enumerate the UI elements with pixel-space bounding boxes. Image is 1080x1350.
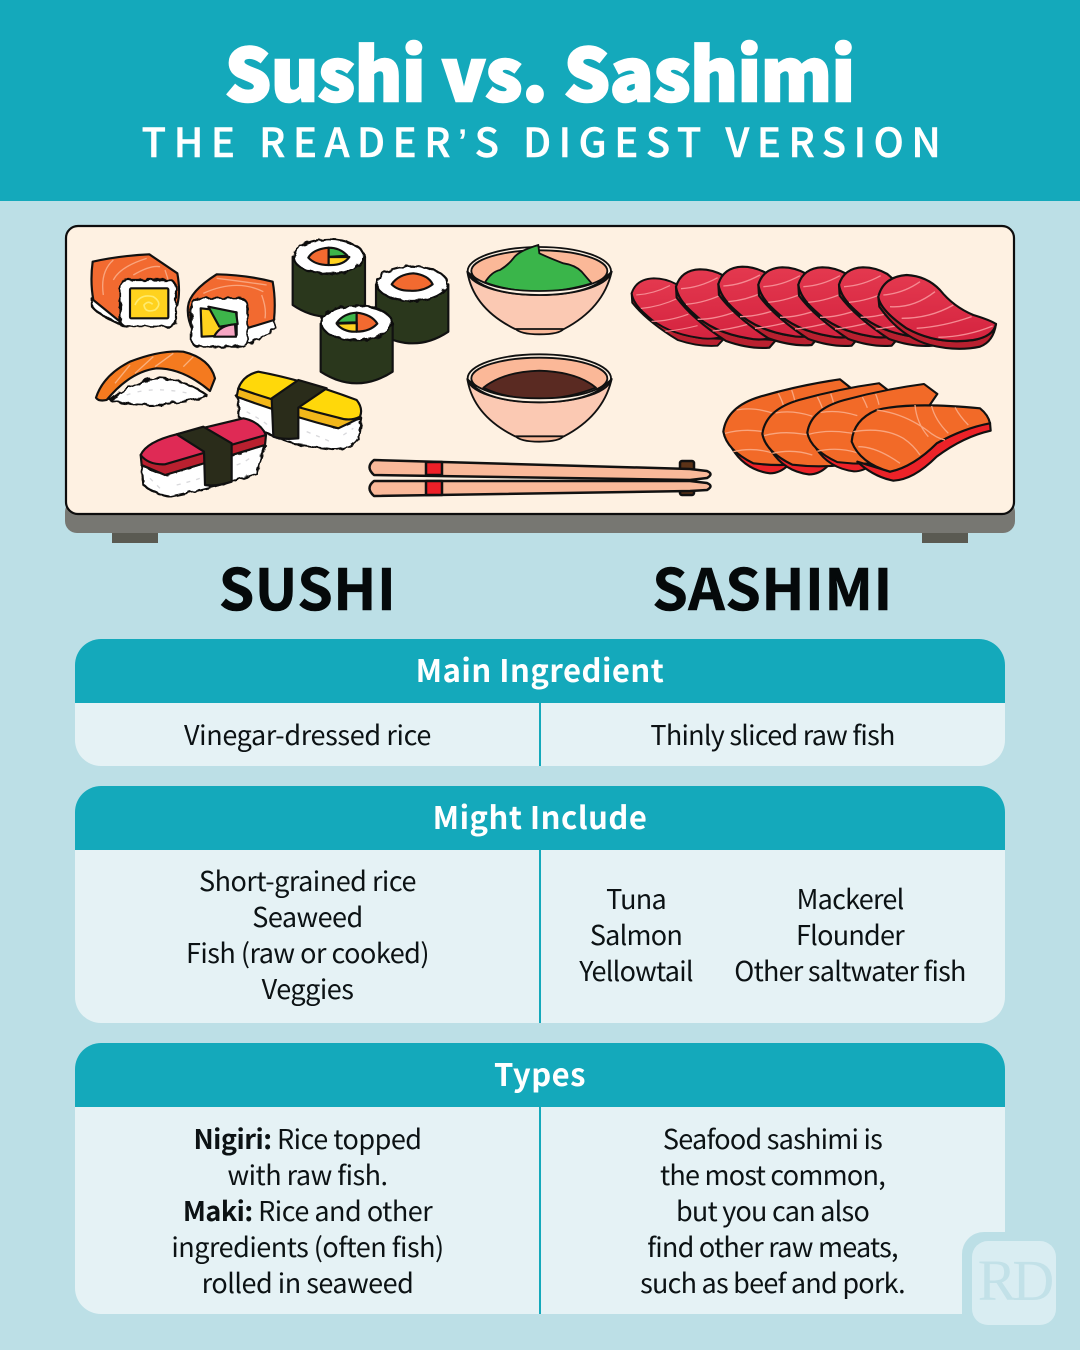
sashimi fish list two: Mackerel [796,878,904,917]
panel heading [75,1043,1005,1107]
sushi types text [171,1118,444,1301]
sushi types text: ingredients (often fish) [171,1226,444,1265]
icon: salmon slices [723,379,991,481]
sushi group [91,239,448,497]
sashimi types text: the most common, [660,1154,885,1193]
sushi types text: Nigiri: Rice topped [193,1118,422,1157]
panel heading: Might Include [433,793,647,838]
sashimi types text: but you can also [676,1190,869,1229]
tray surface [66,226,1014,514]
sashimi types text [640,1118,905,1301]
icon: maki roll back right [376,266,448,343]
sashimi main ingredient: Thinly sliced raw fish [650,714,895,753]
sushi types text: Maki: Rice and other [183,1190,432,1229]
icon: tuna slices [632,267,996,349]
sushi types text: rolled in seaweed [202,1262,413,1301]
icon: soy sauce bowl [467,354,612,442]
icon: tuna nigiri [141,418,266,497]
logo: RD watermark: RD [978,1248,1050,1313]
header banner [0,0,1080,201]
panel: might include [75,786,1005,1023]
subtitle: THE READER’S DIGEST VERSION [142,111,948,169]
sushi types text: with raw fish. [227,1154,388,1193]
tray base [65,500,1015,543]
sashimi fish list one: Tuna [606,878,666,917]
panel: types [75,1043,1005,1314]
sashimi types text: find other raw meats, [647,1226,898,1265]
panel: main ingredient [75,639,1005,766]
sashimi fish list two: Flounder [796,914,904,953]
icon: salmon roll with vegetables [188,274,275,347]
sushi might include list [186,860,429,1007]
sashimi fish list two [734,878,966,989]
sushi might include list: Veggies [262,968,353,1007]
sashimi fish list one: Yellowtail [579,950,693,989]
column divider [539,703,541,766]
sashimi types text: such as beef and pork. [640,1262,905,1301]
column heading: sushi: SUSHI [219,545,396,627]
sashimi types text: Seafood sashimi is [663,1118,882,1157]
panel heading [75,786,1005,850]
panel heading [75,639,1005,703]
sushi might include list: Short-grained rice [199,860,416,899]
tuna sashimi group [632,267,996,481]
column heading: sashimi: SASHIMI [652,545,893,627]
icon: chopsticks [370,460,710,496]
icon: salmon roll with tamago [91,254,179,327]
title: Sushi vs. Sashimi [225,17,855,122]
column divider [539,1107,541,1314]
icon: tamago nigiri [237,372,362,450]
sashimi fish list one [579,878,693,989]
illustration: sushi board [64,224,1016,543]
logo backing notch [962,1232,1080,1350]
panel heading: Main Ingredient [416,646,664,691]
sushi might include list: Seaweed [252,896,363,935]
icon: maki roll front [321,306,393,383]
sashimi fish list one: Salmon [590,914,682,953]
logo: RD watermark [972,1241,1056,1325]
icon: salmon nigiri [96,351,215,405]
icon: maki roll back left [293,239,365,317]
bowls group [467,245,612,442]
icon: wasabi bowl [467,245,612,334]
panel heading: Types [494,1050,586,1095]
sashimi fish list two: Other saltwater fish [734,950,966,989]
sushi might include list: Fish (raw or cooked) [186,932,429,971]
sushi main ingredient: Vinegar-dressed rice [184,714,431,753]
column divider [539,850,541,1023]
